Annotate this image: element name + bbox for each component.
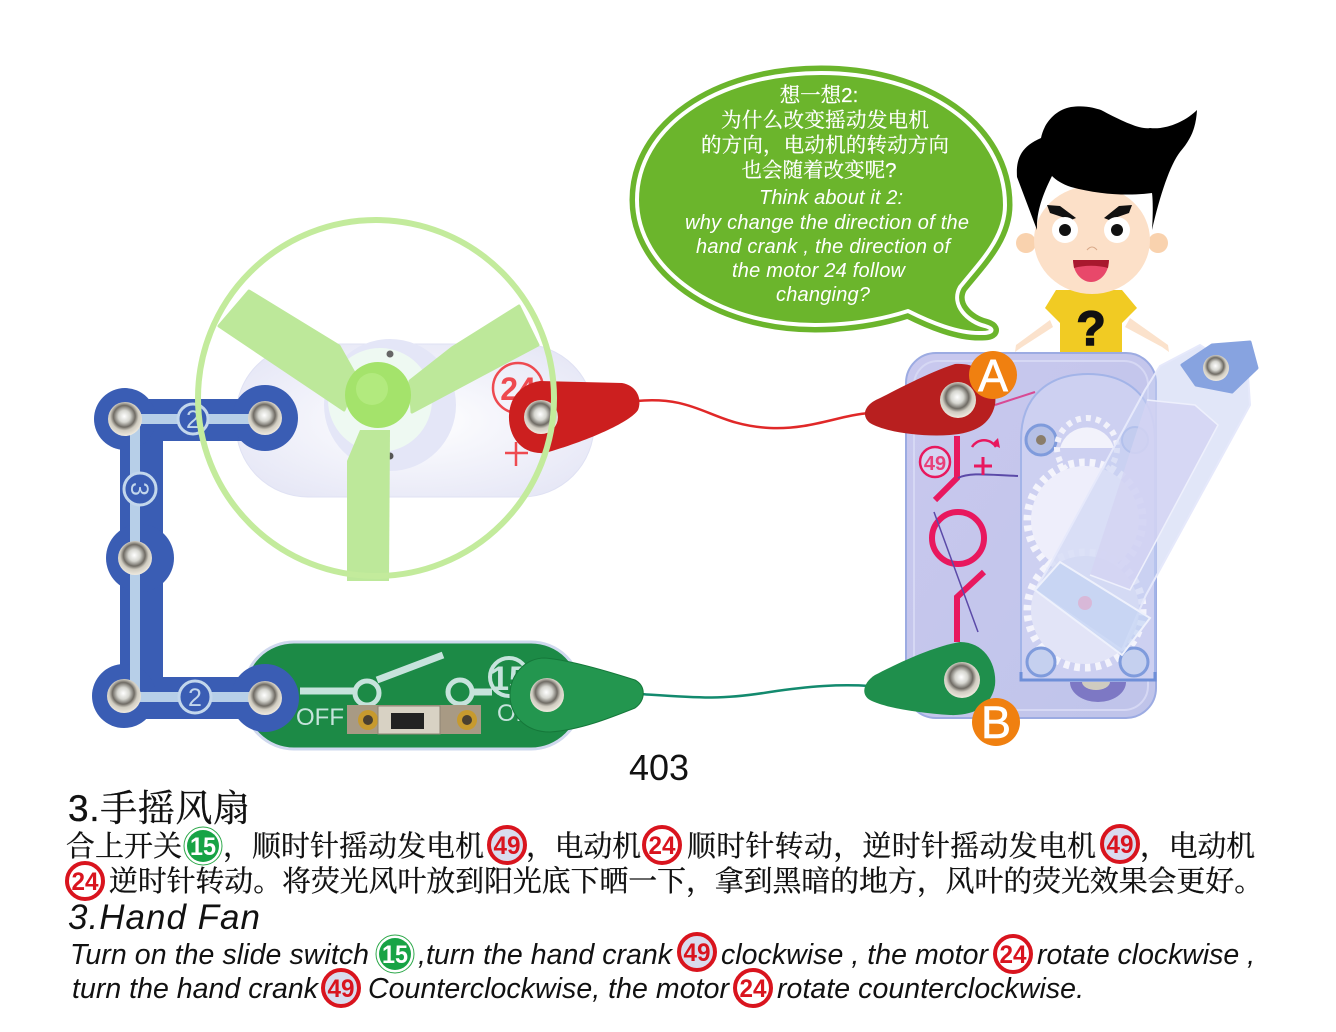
instructions: English: ,turn the hand crank	[418, 939, 674, 971]
speech bubble: the motor 24 follow	[732, 260, 907, 282]
wire: red	[636, 400, 870, 428]
red clip: motor side	[509, 381, 639, 453]
badge 49: 49	[1106, 831, 1134, 859]
slide switch body	[347, 705, 481, 734]
badge 24: 24	[1000, 941, 1027, 969]
badge 15	[184, 827, 222, 865]
label B: B	[981, 697, 1011, 748]
speech bubble	[637, 73, 1005, 333]
badge 24	[735, 970, 771, 1006]
slide switch module 15	[244, 642, 581, 749]
badge 49: 49	[328, 975, 354, 1003]
motor module 24: 24	[500, 371, 536, 407]
instructions: Chinese: 顺时针转动，逆时针摇动发电机	[687, 831, 1096, 863]
blue snap conductors	[92, 385, 299, 732]
speech bubble: changing?	[776, 284, 871, 306]
blue snap conductors: 3	[125, 482, 153, 496]
instructions: English	[70, 934, 1255, 1006]
green clip: generator terminal B	[864, 642, 995, 715]
badge 15: 15	[190, 833, 216, 861]
wire: green	[640, 685, 870, 698]
speech bubble: Think about it 2:	[759, 187, 903, 209]
badge 24	[995, 936, 1031, 972]
instructions: English: Counterclockwise, the motor	[368, 973, 730, 1005]
bottom snap	[1070, 682, 1126, 702]
heading: Chinese: 3.手摇风扇	[68, 788, 250, 829]
label A: A	[978, 350, 1008, 401]
badge 49	[679, 934, 715, 970]
badge 49: 49	[684, 939, 710, 967]
instructions: Chinese: 合上开关	[66, 831, 182, 863]
blue snap conductors: 2	[188, 684, 202, 712]
label B	[972, 697, 1020, 748]
speech bubble: 也会随着改变呢?	[742, 159, 896, 182]
badge 24	[67, 863, 103, 899]
badge 24: 24	[72, 868, 99, 896]
instructions: Chinese: ，电动机	[526, 831, 641, 863]
instructions: English: clockwise , the motor	[721, 939, 990, 971]
speech bubble: 的方向，电动机的转动方向	[701, 134, 949, 157]
gear housing	[1021, 374, 1155, 680]
instructions: English: rotate counterclockwise.	[777, 973, 1084, 1005]
badge 15	[376, 935, 414, 973]
hand crank	[1035, 342, 1257, 655]
project number: 403	[629, 747, 689, 788]
instructions: Chinese: 逆时针转动。将荧光风叶放到阳光底下晒一下，拿到黑暗的地方，风叶的荧光效果会更好。	[109, 866, 1263, 898]
motor module 24	[236, 339, 594, 497]
instructions: English: turn the hand crank	[72, 973, 320, 1005]
instructions: Chinese	[66, 826, 1263, 899]
slide switch module 15: ON	[497, 700, 533, 727]
label A	[969, 350, 1017, 401]
badge 24: 24	[740, 975, 767, 1003]
speech bubble: 想一想2:	[780, 84, 858, 107]
instructions: Chinese: ，顺时针摇动发电机	[223, 831, 484, 863]
green clip: switch side	[510, 658, 643, 732]
badge 24: 24	[648, 832, 676, 860]
instructions: English: Turn on the slide switch	[70, 939, 369, 971]
badge 49	[489, 827, 525, 863]
badge 24	[644, 827, 680, 863]
badge 49: 49	[494, 832, 520, 860]
badge 49	[1102, 826, 1138, 862]
instructions: Chinese: ，电动机	[1140, 831, 1255, 863]
slide switch module 15: 15	[490, 660, 528, 698]
generator module 49	[906, 342, 1257, 718]
printed circuit symbol: 49	[924, 453, 946, 475]
speech bubble: why change the direction of the	[685, 212, 969, 234]
blue snap conductors: 2	[186, 406, 200, 434]
speech bubble: 为什么改变摇动发电机	[721, 109, 929, 132]
fan blade	[198, 220, 554, 581]
slide switch module 15: OFF	[296, 704, 344, 731]
badge 49	[323, 970, 359, 1006]
cartoon boy	[1015, 106, 1197, 356]
heading: English: 3.Hand Fan	[68, 898, 260, 937]
speech bubble: hand crank , the direction of	[696, 236, 952, 258]
red clip: generator terminal A	[865, 364, 995, 435]
cartoon boy: ?	[1076, 303, 1106, 356]
instructions: English: rotate clockwise ,	[1037, 939, 1255, 971]
badge 15: 15	[382, 941, 408, 969]
printed circuit symbol	[920, 392, 1035, 642]
